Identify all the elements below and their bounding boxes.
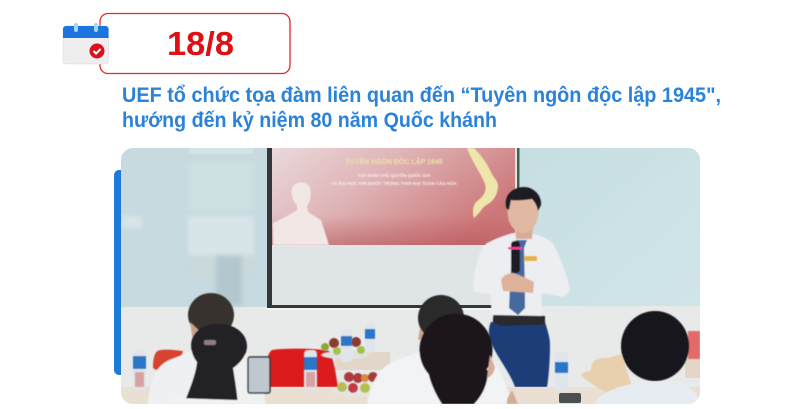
man's head: [188, 293, 234, 337]
shirt of left man: [148, 346, 266, 404]
audience left: [148, 293, 270, 404]
hands: [501, 273, 534, 293]
laptop: [248, 357, 270, 393]
slide portrait: [273, 182, 329, 245]
projector screen: VÀ ĐẠI HỌC KHI BƯỚC TRONG THỜI ĐẠI TOÀN CẦU HÓA: [331, 179, 458, 186]
date text: 18/8: [167, 25, 234, 62]
front table: [121, 387, 700, 404]
hair: [506, 187, 541, 211]
back table: [335, 352, 390, 370]
microphone: [511, 241, 520, 273]
icon: calendar: [63, 23, 108, 64]
accent bar: [114, 170, 122, 375]
tie: [509, 240, 527, 315]
audience centre: [367, 295, 518, 404]
neck and face: [515, 226, 533, 239]
title: UEF tổ chức tọa đàm liên quan đến “Tuyên ngôn độc lập 1945",: [122, 84, 721, 107]
back head: [417, 294, 464, 334]
photo: speaker at seminar: [121, 148, 700, 404]
phone on table: [559, 393, 581, 403]
left glass panel: [121, 148, 268, 307]
title: [122, 84, 721, 132]
projector screen: TỌA ĐÀM CHỦ QUYỀN QUỐC GIA: [357, 172, 431, 178]
front head: [418, 314, 494, 374]
speaker: [473, 187, 570, 387]
right glass panel: [518, 148, 700, 306]
name badge: [524, 256, 537, 261]
fruit plates: [321, 337, 381, 396]
slide map: [467, 148, 498, 218]
trousers: [489, 322, 550, 387]
woman with ponytail: [184, 324, 247, 404]
audience right: [581, 311, 700, 404]
date badge: [100, 14, 290, 74]
shirt: [367, 352, 513, 404]
slide heading: TUYÊN NGÔN ĐỘC LẬP 1945: [345, 157, 443, 166]
projector screen: [265, 148, 520, 310]
belt: [493, 315, 545, 326]
infographic canvas: [62, 12, 720, 404]
red chairs: [153, 331, 700, 387]
shirt: [473, 232, 570, 319]
wall: [121, 306, 700, 387]
title: hướng đến kỷ niệm 80 năm Quốc khánh: [122, 109, 497, 132]
water bottles: [133, 323, 568, 392]
